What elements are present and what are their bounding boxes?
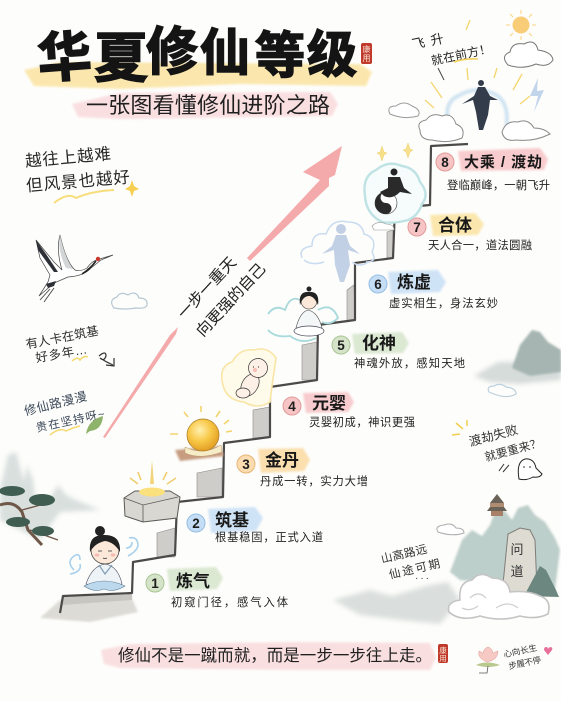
step 3: 3 [242, 457, 250, 472]
title seal [361, 43, 372, 64]
title highlight [24, 62, 372, 89]
note: mountain high road far [379, 542, 441, 584]
step 4: 4 [288, 399, 296, 414]
icon: baby in golden cloud [222, 349, 276, 406]
halo [447, 90, 507, 130]
pagoda [487, 494, 507, 516]
step 7 [408, 213, 532, 252]
bottom seal: 用 [439, 654, 447, 663]
note: harder but better view: 越往上越难 [24, 144, 112, 171]
clouds [419, 115, 463, 142]
title text: 修 [146, 24, 198, 82]
ascent caption: 就在前方！ [430, 41, 492, 68]
rays [425, 20, 530, 108]
step 2: 筑基 [215, 510, 249, 530]
step 2 [187, 507, 323, 544]
icon: golden pill [170, 406, 232, 461]
note: persistence [22, 388, 106, 435]
stele [502, 528, 537, 598]
mountain scene with stele [333, 494, 560, 624]
bottom banner [101, 642, 436, 670]
footer note: 心向长生 [503, 642, 538, 659]
step 1: 1 [151, 576, 159, 591]
step 6: 炼虚 [397, 272, 431, 292]
step 5: 化神 [362, 333, 396, 353]
staircase [40, 144, 468, 622]
icon: taiji figure in teal halo [364, 143, 426, 230]
background mountains right [474, 330, 561, 397]
note: harder but better view: 但风景也越好 [25, 168, 131, 195]
bottom seal [438, 644, 448, 663]
note: stuck at foundation [24, 323, 114, 366]
note: stuck at foundation: 有人卡在筑基 [24, 323, 100, 352]
title text: 夏 [94, 29, 148, 89]
step 3: 丹成一转，实力大增 [260, 474, 368, 488]
note: persistence: 贵在坚持呀~ [35, 406, 106, 435]
step 7: 合体 [438, 215, 472, 235]
bottom banner: 修仙不是一蹴而就，而是一步一步往上走。 [118, 646, 432, 665]
title seal: 用 [362, 54, 370, 63]
step 6: 虚实相生，身法玄妙 [389, 296, 498, 310]
step 4: 元婴 [312, 394, 346, 413]
step 8: 8 [441, 155, 449, 170]
rising pink arrow [103, 146, 342, 438]
stele: 问 [510, 542, 524, 557]
icon: pine tree [0, 486, 58, 545]
footer note: 步履不停 [508, 654, 542, 671]
note: harder but better view [24, 144, 139, 203]
mountains [450, 505, 560, 590]
step 2: 2 [192, 516, 200, 531]
icon: ghost [518, 459, 542, 480]
step 1: 炼气 [176, 572, 210, 591]
sparkles [377, 143, 413, 161]
step risers [157, 230, 393, 557]
note: stuck at foundation: 好多年… [35, 342, 88, 365]
step 3 [237, 448, 368, 488]
step 1: 初窥门径，感气入体 [171, 595, 288, 609]
ascent caption [411, 31, 492, 68]
note: mountain high road far: ··· [415, 573, 431, 584]
step 4 [283, 392, 415, 429]
note: mountain high road far: 仙途可期 [388, 556, 441, 582]
step 7: 7 [413, 220, 421, 235]
icon: heart [544, 647, 552, 655]
title text: 等 [255, 28, 305, 84]
background mountains left with pine [0, 452, 100, 545]
ascending immortal scene [389, 10, 553, 142]
step 3: 金丹 [265, 450, 299, 470]
title seal: 康 [362, 44, 370, 54]
title block [24, 24, 372, 90]
icon: flying crane [36, 235, 113, 302]
title text: 华 [36, 26, 94, 90]
icon: leaf [86, 416, 103, 434]
title text: 级 [307, 27, 357, 83]
icon: lotus [476, 647, 500, 673]
lightning [530, 78, 544, 112]
step 2: 根基稳固，正式入道 [215, 530, 323, 544]
note: tribulation failure: 渡劫失败 [467, 422, 520, 449]
note: mountain high road far: 山高路远 [379, 542, 429, 566]
ascent caption: 飞升 [411, 31, 445, 52]
title text [36, 24, 357, 90]
step 8: 大乘 / 渡劫 [464, 153, 542, 171]
icon: meditating figure with teal swirl [268, 286, 338, 341]
step 5: 神魂外放，感知天地 [354, 356, 465, 370]
sun [506, 10, 536, 40]
note: tribulation failure: 就要重来？ [483, 436, 543, 464]
step 4: 灵婴初成，神识更强 [309, 415, 415, 429]
stair outline [60, 144, 468, 613]
ascending silhouette [462, 80, 498, 130]
bottom seal: 康 [439, 645, 447, 655]
footer note [503, 642, 552, 671]
icon: stone altar with flame [124, 460, 180, 522]
icon: meditating child [70, 526, 138, 590]
foreground clouds [448, 574, 549, 619]
step 5 [332, 332, 465, 370]
step 7: 天人合一，道法圆融 [428, 238, 532, 252]
note: tribulation failure [452, 420, 543, 480]
note: persistence: 修仙路漫漫 [22, 388, 88, 418]
rock base [40, 594, 138, 622]
icon: blue nascent spirit [301, 221, 374, 282]
small cloud [112, 293, 147, 309]
step 8: 登临巅峰，一朝飞升 [447, 178, 550, 192]
step 6 [369, 270, 498, 310]
arrow caption: 向更强的自己 [193, 260, 269, 340]
subtitle: 一张图看懂修仙进阶之路 [86, 93, 330, 118]
title text: 仙 [200, 25, 250, 81]
step 1 [146, 567, 288, 609]
sun cloud [504, 42, 553, 67]
arrow caption: 一步一重天 [174, 254, 240, 322]
stele: 道 [510, 564, 524, 579]
step 8 [436, 148, 550, 192]
step 5: 5 [337, 338, 345, 353]
step 6: 6 [374, 277, 382, 292]
